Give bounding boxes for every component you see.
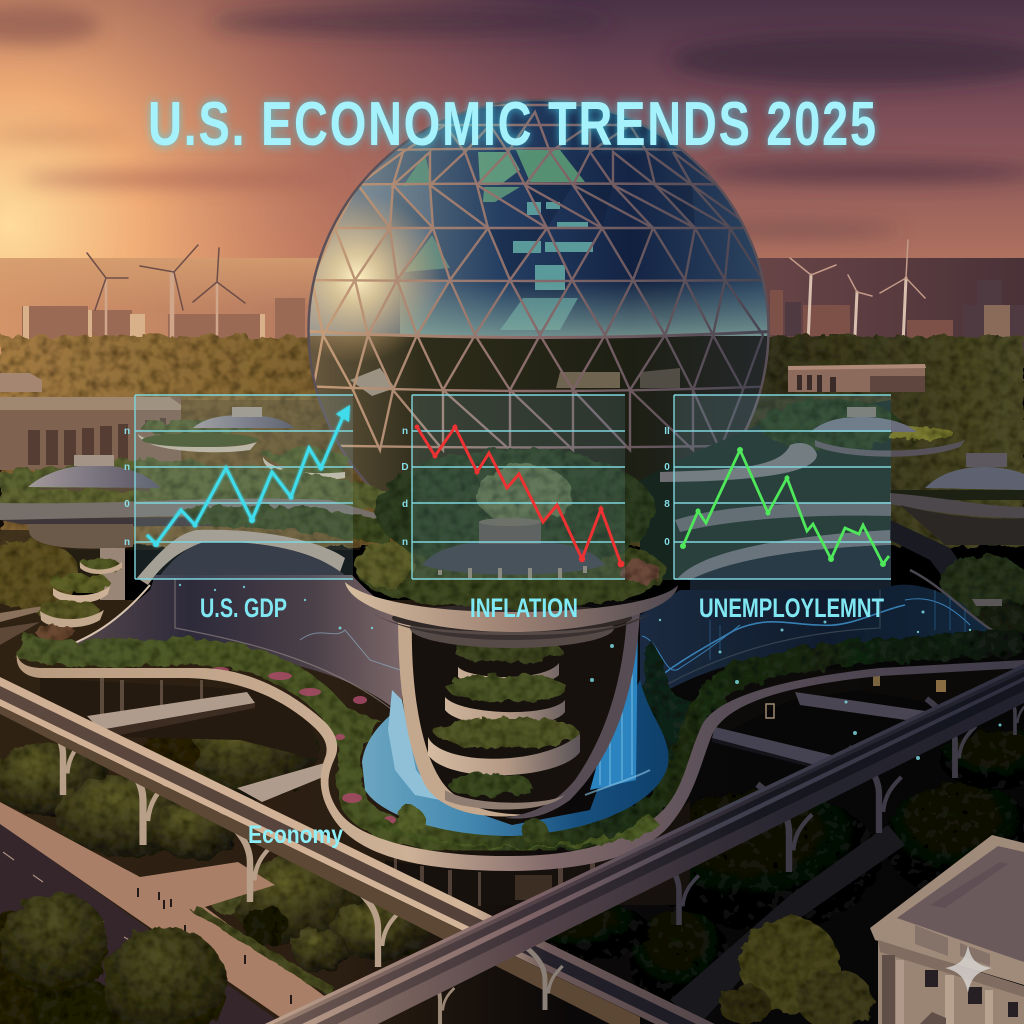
line series: GDP rising with arrow: [147, 405, 350, 547]
axis labels: II: [664, 426, 670, 437]
axis labels: n: [402, 426, 408, 437]
street and sidewalk: [0, 802, 335, 1024]
distant city with wind turbines: [0, 240, 1024, 368]
rear planted band and roof arc: [180, 506, 392, 545]
line series: unemployment: [680, 447, 889, 567]
curved screen wall: right with data lines: [640, 570, 1012, 707]
curved screen wall: left: [50, 575, 402, 715]
upper right garden disc: [810, 407, 965, 457]
upper back platforms: left: [0, 407, 392, 610]
axis labels: n: [402, 537, 408, 548]
scattered data sparkles: [179, 584, 1002, 760]
panel: unemployment chart: [664, 395, 891, 579]
axis labels: [124, 426, 130, 548]
central tower interior: [398, 612, 640, 819]
road two with supports: [265, 664, 1024, 1024]
axis labels: D: [401, 462, 409, 473]
undercroft windows: [40, 668, 1024, 906]
axis labels: [401, 426, 409, 548]
left planter stack: [35, 559, 122, 640]
tree right foreground: [719, 917, 873, 1024]
title: U.S. ECONOMIC TRENDS 2025: [148, 89, 876, 159]
road one with supports: [0, 677, 760, 1024]
axis labels: n: [124, 462, 130, 473]
central garden disc with dome: [345, 448, 678, 648]
ground plane with trees: [0, 540, 1024, 1024]
road one rear segment support: [521, 943, 563, 1010]
axis labels: n: [124, 537, 130, 548]
icon: glass geodesic dome: [307, 98, 770, 542]
left garden dome: [28, 455, 160, 494]
axis labels: 0: [664, 537, 670, 548]
panel: U.S. GDP chart: [124, 395, 353, 579]
chart label: Unemployment: UNEMPLOYLEMNT: [699, 593, 884, 623]
foliage at pool front: [372, 806, 660, 848]
axis labels: [664, 426, 670, 548]
axis labels: 8: [664, 499, 670, 510]
teal lit windows on dome: [500, 202, 593, 330]
axis labels: d: [402, 499, 408, 510]
blue pool and waterfalls: [362, 620, 668, 836]
second disc at dome base: [263, 448, 350, 480]
pedestrian path on the right: [670, 825, 905, 1024]
axis labels: 0: [124, 499, 130, 510]
building: right low block: [788, 364, 926, 392]
upper left garden disc: [138, 407, 295, 452]
icon: sparkle watermark: [945, 945, 992, 993]
garden terraces on curved platform: [20, 640, 1024, 840]
glass facet shading: [490, 185, 694, 299]
back deck seen through unemployment panel: [640, 399, 900, 590]
tree belt behind the dome: [0, 336, 1024, 590]
sky background: [0, 0, 1024, 262]
axis labels: n: [124, 426, 130, 437]
upper back platforms: right: [810, 407, 1024, 640]
outer curved platform beam: [17, 655, 1024, 871]
right garden dome: [925, 453, 1024, 490]
chart label: Inflation: INFLATION: [470, 593, 578, 623]
ring deck: [0, 499, 392, 528]
stacked planter tiers: [428, 637, 580, 810]
central dome: [422, 518, 605, 580]
panel: inflation chart: [401, 395, 625, 579]
chart label: U.S. GDP: U.S. GDP: [200, 593, 287, 623]
classical building bottom right: [870, 835, 1024, 1024]
building: left government block: [0, 373, 181, 470]
pink flowers in the terrace: [211, 667, 396, 824]
caption: Economy: Economy: [248, 821, 343, 849]
line series: inflation falling: [414, 424, 624, 568]
icon: wind turbines: [87, 240, 925, 368]
side bridges: [0, 600, 932, 802]
axis labels: 0: [664, 462, 670, 473]
green reflections on dome: [403, 150, 585, 272]
